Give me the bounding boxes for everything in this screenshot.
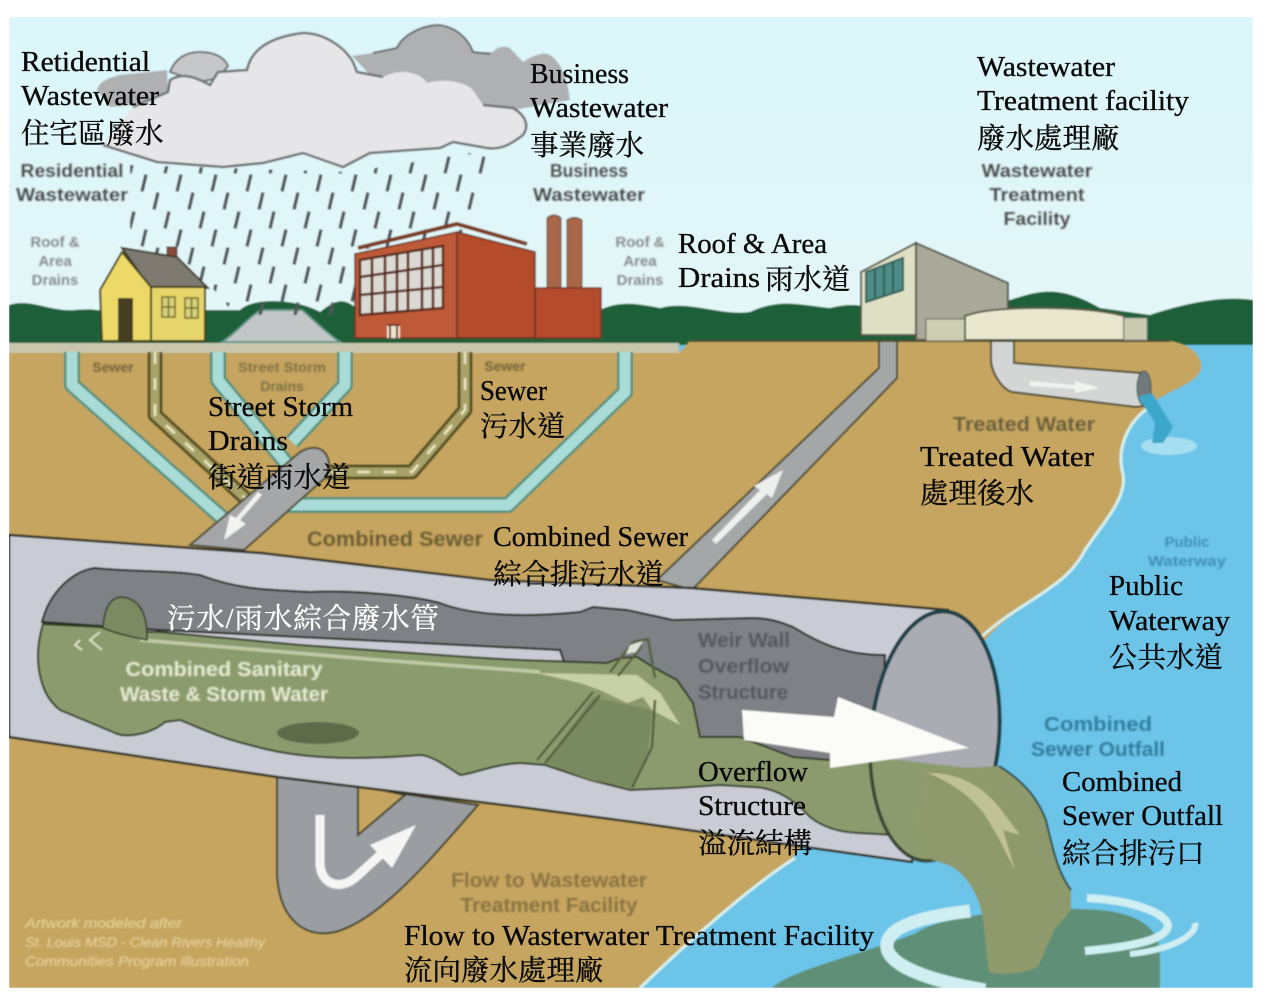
annotation: roof and area drains: Drains: [678, 263, 760, 294]
annotation: flow to wastewater treatment facility: 流向廢水處理廠: [404, 955, 604, 987]
background: sky: [9, 17, 1253, 347]
weir panel: [545, 697, 653, 788]
windows: [162, 297, 198, 318]
label: wastewater treatment facility: Facility: [1004, 209, 1070, 229]
far left gray cloud: [97, 70, 168, 107]
annotation: combined sewer outfall: 綜合排污口: [1062, 838, 1205, 870]
annotation: residential wastewater: Retidential: [21, 47, 150, 78]
annotation: business wastewater: Wastewater: [530, 93, 669, 124]
blurred original labels: [16, 161, 1227, 969]
label: combined sanitary waste: Waste & Storm Water: [120, 684, 328, 706]
annotation: wastewater treatment facility: Wastewater: [977, 52, 1116, 83]
annotation: roof and area drains: [678, 229, 851, 296]
street surface: [222, 310, 340, 342]
mouth ellipse: [860, 606, 1010, 866]
annotation: public waterway: [1109, 571, 1230, 674]
cloud outline: [103, 33, 526, 167]
annotation: overflow structure: [698, 757, 812, 860]
water in mouth: [860, 606, 1010, 866]
weir posts: [537, 639, 655, 788]
annotation: street storm drains: Street Storm: [208, 392, 353, 423]
annotation: roof and area drains: 雨水道: [765, 264, 851, 296]
label: roof and area drains left: Area: [38, 253, 72, 270]
inner land wedge: [358, 785, 405, 835]
water streaks: [140, 640, 540, 672]
annotation: combined sewer pipe (white): 污水/雨水綜合廢水管: [167, 603, 439, 635]
side wall: [916, 243, 1008, 340]
outfall stream: [912, 766, 1071, 974]
label: business wastewater: Wastewater: [533, 185, 645, 205]
big white flow arrow: [742, 697, 969, 768]
annotation: wastewater treatment facility: [977, 52, 1189, 155]
sewage water: [38, 624, 895, 835]
label: public waterway: Public: [1164, 534, 1210, 551]
annotation: residential wastewater: [21, 47, 164, 150]
curved flow arrow: [320, 815, 380, 884]
combined sewer to plant pipe: [657, 341, 897, 590]
annotation: combined sewer: [493, 522, 689, 591]
annotation: sewer: Sewer: [480, 376, 548, 407]
weir foam: [537, 673, 680, 725]
ground line: [690, 340, 1170, 342]
label: combined sewer outfall: Combined: [1044, 714, 1152, 736]
label: combined sanitary waste: Combined Sanitary: [126, 659, 323, 681]
annex: [535, 288, 601, 338]
annotation: combined sewer outfall: Combined: [1062, 767, 1182, 798]
tube body: [9, 535, 948, 862]
label: residential wastewater: Residential: [20, 161, 124, 181]
storm drains: [72, 352, 625, 530]
right block: [1124, 318, 1147, 340]
stream edge: [999, 766, 1071, 890]
label: business wastewater: Business: [550, 161, 628, 181]
large tank: [965, 308, 1124, 340]
small left lobe: [170, 52, 228, 82]
label: combined sewer outfall: Sewer Outfall: [1031, 739, 1165, 761]
house: [100, 247, 208, 341]
label: sewer left: Sewer: [92, 359, 134, 375]
splash: [1141, 437, 1197, 455]
annotation: residential wastewater: Wastewater: [21, 81, 160, 112]
annotation: sewer: [480, 376, 566, 443]
annotation: overflow structure: Overflow: [698, 757, 809, 788]
window mullions: [875, 262, 893, 299]
annotation: flow to wastewater treatment facility: [404, 921, 874, 987]
label: roof and area drains left: Drains: [32, 272, 78, 289]
annotation: business wastewater: 事業廢水: [530, 130, 644, 162]
arrow: [1030, 381, 1100, 393]
door: [387, 325, 400, 338]
annotation: residential wastewater: 住宅區廢水: [21, 118, 164, 150]
right ripple: [1085, 898, 1168, 951]
label: combined sewer: Combined Sewer: [307, 528, 483, 551]
label: sewer right: Sewer: [484, 358, 526, 374]
annotation: sewer: 污水道: [480, 411, 566, 443]
cloud group: [97, 25, 570, 167]
annotation: street storm drains: 街道雨水道: [208, 462, 351, 494]
label: weir wall overflow structure: Overflow: [698, 656, 789, 678]
side wall: [151, 287, 205, 341]
dark ellipse: [277, 722, 359, 744]
annotation: public waterway: Waterway: [1109, 606, 1230, 637]
artwork credit: St. Louis MSD - Clean Rivers Healthy: [25, 934, 266, 950]
label: flow to wastewater treatment facility: Treatment Facility: [460, 895, 638, 917]
shoreline highlight: [640, 408, 1148, 988]
main combined sewer tube: [9, 535, 948, 862]
artwork credit: Communities Program illustration: [25, 953, 249, 969]
door bars: [387, 325, 400, 338]
sanitary sewers: [155, 352, 465, 498]
annotation: treated water: Treated Water: [920, 442, 1095, 473]
annotation: combined sewer outfall: [1062, 767, 1223, 870]
front wall: [355, 232, 457, 338]
label: wastewater treatment facility: Treatment: [990, 185, 1085, 205]
annotation: wastewater treatment facility: 廢水處理廠: [977, 123, 1120, 155]
annotation: street storm drains: Drains: [208, 426, 288, 457]
front wall: [100, 252, 151, 341]
label: roof and area drains right: Drains: [617, 272, 663, 289]
annotation: roof and area drains: Roof & Area: [678, 229, 828, 260]
annotation: business wastewater: Business: [530, 59, 629, 90]
label: wastewater treatment facility: Wastewater: [982, 161, 1092, 181]
arrow: [712, 470, 783, 544]
background: public waterway: [642, 344, 1253, 988]
outfall pipe mouth: [860, 606, 1010, 866]
foam lines: [75, 632, 102, 650]
right gray cloud: [352, 25, 570, 110]
label: weir wall overflow structure: Weir Wall: [698, 630, 790, 652]
annotation: street storm drains: [208, 392, 353, 494]
weir top light: [626, 641, 643, 654]
artwork credit: Artwork modeled after: [24, 915, 184, 931]
front wall: [861, 243, 916, 335]
chimney: [166, 245, 178, 258]
annotation: overflow structure: Structure: [698, 791, 806, 822]
rain: [130, 150, 490, 315]
annotation: combined sewer: Combined Sewer: [493, 522, 689, 553]
treated water outlet pipe: [991, 341, 1197, 455]
factory: [355, 215, 601, 338]
label: public waterway: Waterway: [1148, 553, 1227, 570]
treatment plant: [861, 243, 1147, 341]
label: weir wall overflow structure: Structure: [698, 682, 788, 704]
front cloud: [103, 33, 526, 167]
annotation: wastewater treatment facility: Treatment facility: [977, 86, 1189, 117]
background: tree line: [9, 292, 1253, 345]
outlet mouth: [1137, 371, 1151, 405]
label: residential wastewater: Wastewater: [16, 185, 128, 205]
combined sewer inlet pipe: [190, 448, 329, 550]
smokestacks: [547, 215, 582, 290]
annotation: overflow structure: 溢流結構: [698, 828, 812, 860]
ripple rings: [887, 911, 985, 990]
label: roof and area drains right: Area: [623, 253, 657, 270]
windows: [866, 258, 903, 302]
road strip: [9, 343, 679, 353]
arrow: [224, 492, 262, 540]
small tank: [926, 319, 966, 341]
label: flow to wastewater treatment facility: Flow to Wastewater: [451, 870, 647, 892]
door: [118, 298, 133, 340]
lower flow pipe: [277, 775, 478, 933]
label: street storm drains: Street Storm: [238, 359, 326, 375]
label: treated water: Treated Water: [953, 414, 1095, 436]
treated water stream: [1138, 393, 1173, 443]
annotation: public waterway: 公共水道: [1109, 642, 1223, 674]
roof: [122, 248, 208, 288]
annotation: flow to wastewater treatment facility: Flow to Wasterwater Treatment Facility: [404, 921, 874, 952]
ground: land with shoreline: [9, 341, 1201, 988]
label: roof and area drains left: Roof &: [30, 234, 80, 251]
label: street storm drains: Drains: [260, 378, 304, 394]
annotation: public waterway: Public: [1109, 571, 1183, 602]
window grid: [360, 246, 443, 315]
annotation: combined sewer: 綜合排污水道: [493, 559, 664, 591]
annotation: treated water: 處理後水: [920, 478, 1034, 510]
label: roof and area drains right: Roof &: [615, 234, 665, 251]
roof edge: [358, 224, 527, 248]
inner air space: [42, 568, 885, 770]
right wall: [457, 232, 535, 338]
tail ripple: [1130, 923, 1195, 954]
annotation: business wastewater: [530, 59, 669, 162]
pipe inlet opening: [103, 597, 147, 640]
annotation: combined sewer outfall: Sewer Outfall: [1062, 801, 1223, 832]
annotation: treated water: [920, 442, 1095, 510]
stream highlights: [928, 773, 1020, 870]
right lobe outline: [373, 25, 490, 54]
pool of sewage: [772, 898, 1195, 990]
